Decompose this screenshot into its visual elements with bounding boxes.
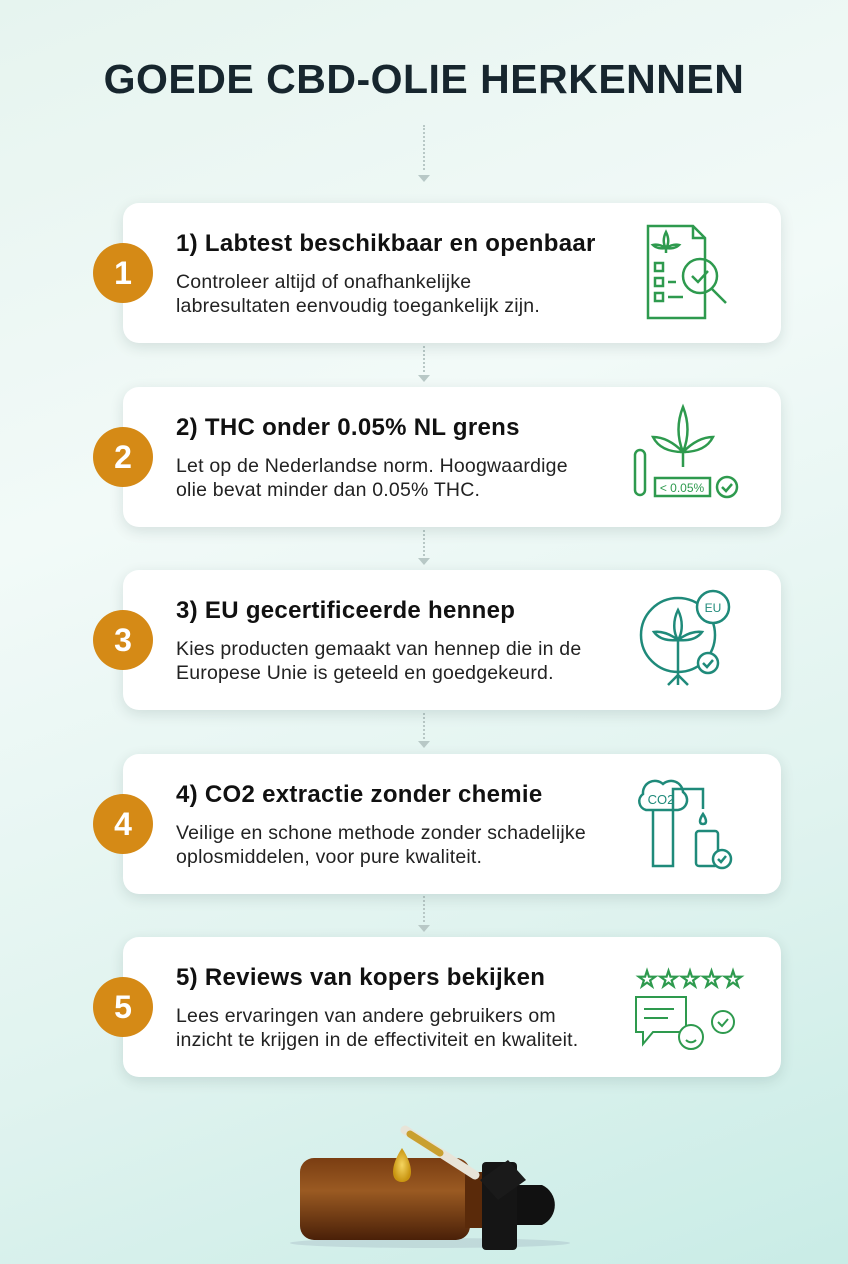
panel: step 3: Europese Unie is geteeld en goedgekeurd. xyxy=(176,662,554,684)
text: 2 xyxy=(114,439,132,475)
panel: step 4: 4) CO2 extractie zonder chemie xyxy=(176,781,542,808)
panel: step 4: Veilige en schone methode zonder schadelijke xyxy=(176,822,586,844)
title: GOEDE CBD-OLIE HERKENNEN xyxy=(104,56,744,102)
panel: step 1: labresultaten eenvoudig toegankelijk zijn. xyxy=(176,295,540,317)
text: 3 xyxy=(114,622,132,658)
icon: stars and speech bubble xyxy=(635,965,744,1050)
text: 1 xyxy=(114,255,132,291)
arrow: title to card 1 xyxy=(423,125,427,170)
text: 5 xyxy=(114,989,132,1025)
panel: step 2: 2) THC onder 0.05% NL grens xyxy=(176,414,520,441)
panel: step 3: 3) EU gecertificeerde hennep xyxy=(176,597,515,624)
panel: step 2: olie bevat minder dan 0.05% THC. xyxy=(176,479,480,501)
panel: step 5 xyxy=(123,937,781,1077)
icon: stars and speech bubble: ☆☆☆☆☆ xyxy=(636,965,744,993)
panel: step 5: 5) Reviews van kopers bekijken xyxy=(176,964,545,991)
icon: EU hemp seal: EU xyxy=(705,601,721,615)
icon: cannabis leaf with test tube xyxy=(634,404,738,498)
panel: step 3: Kies producten gemaakt van hennep die in de xyxy=(176,638,581,660)
panel: step 2 xyxy=(123,387,781,527)
illustration: CBD oil bottle with dropper xyxy=(290,1126,570,1250)
panel: step 1: Controleer altijd of onafhankelijke xyxy=(176,271,471,293)
panel: step 5: inzicht te krijgen in de effectiviteit en kwaliteit. xyxy=(176,1029,578,1051)
panel: step 2: Let op de Nederlandse norm. Hoogwaardige xyxy=(176,455,568,477)
icon: cannabis leaf with test tube: < 0.05% xyxy=(660,481,705,495)
panel: step 1 xyxy=(123,203,781,343)
text: 4 xyxy=(114,806,132,842)
panel: step 1: 1) Labtest beschikbaar en openbaar xyxy=(176,230,596,257)
icon: CO2 extraction: CO2 xyxy=(648,792,674,807)
icon: CO2 extraction xyxy=(638,780,732,870)
panel: step 4: oplosmiddelen, voor pure kwaliteit. xyxy=(176,846,482,868)
icon: EU hemp seal xyxy=(640,590,730,686)
panel: step 5: Lees ervaringen van andere gebruikers om xyxy=(176,1005,556,1027)
panel: step 4 xyxy=(123,754,781,894)
icon: lab report with magnifier xyxy=(646,224,727,320)
panel: step 3 xyxy=(123,570,781,710)
